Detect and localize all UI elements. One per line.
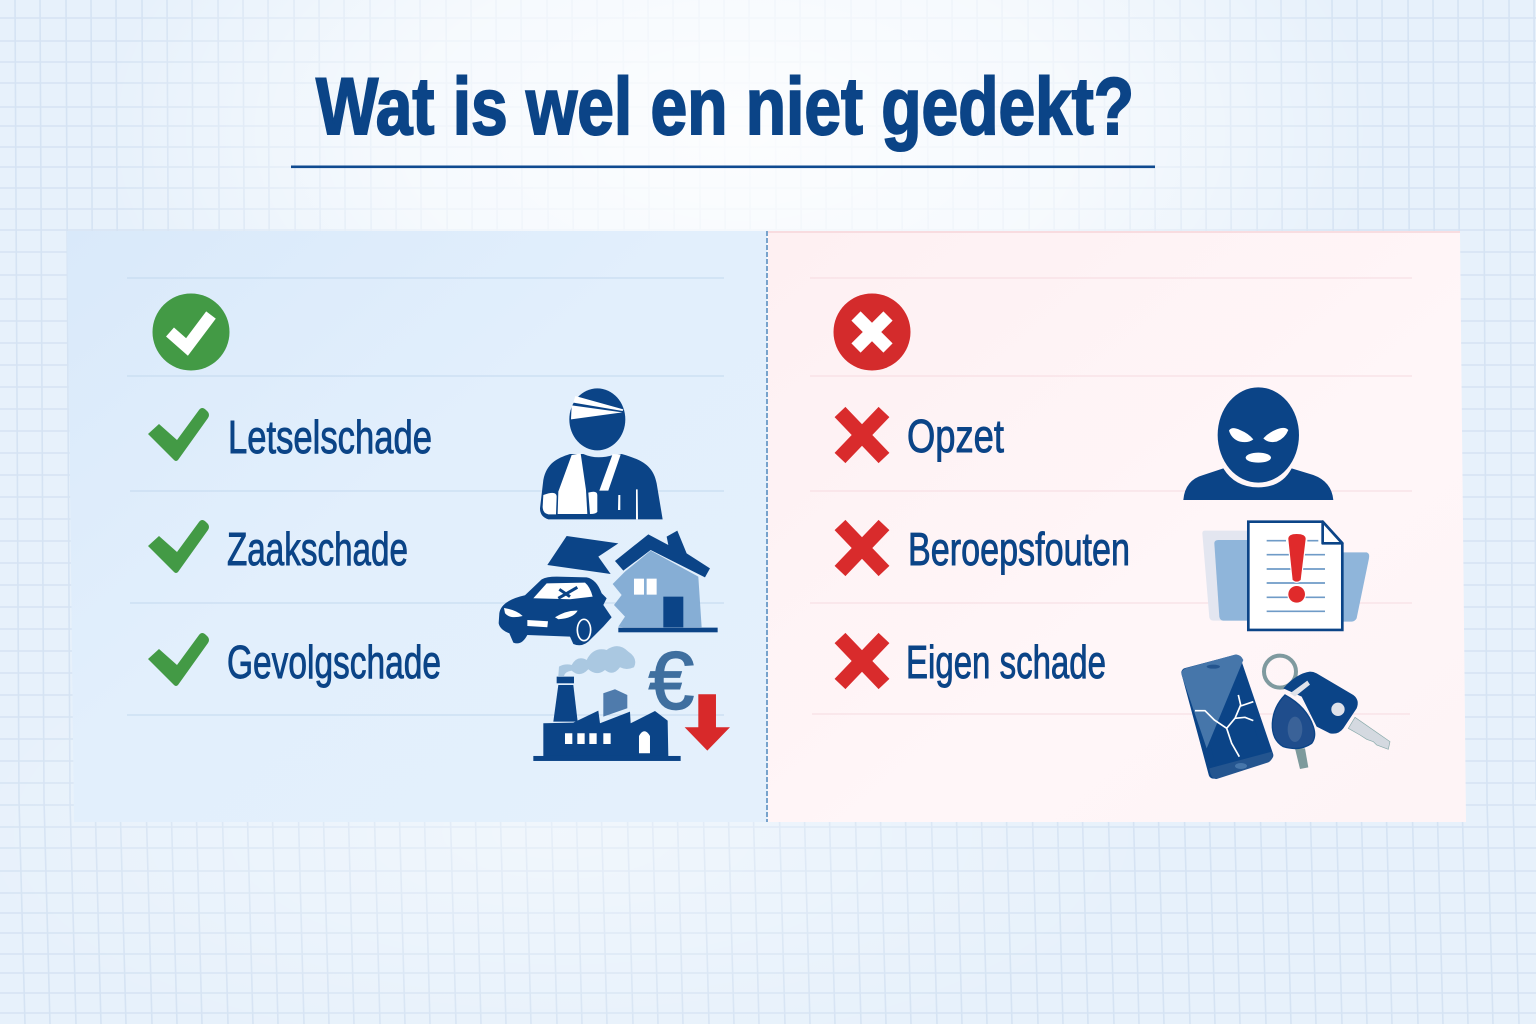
icon: damaged car and house	[499, 531, 718, 645]
item: Zaakschade: Zaakschade	[227, 523, 408, 575]
item: Letselschade: Letselschade	[228, 411, 432, 463]
item: Gevolgschade	[148, 633, 441, 688]
title underline	[291, 166, 1155, 168]
item: Opzet	[840, 410, 1004, 462]
panel: not covered	[768, 231, 1466, 822]
icon: red circle cross	[834, 294, 910, 370]
icon: factory with falling euro	[533, 635, 730, 761]
item: Eigen schade	[840, 636, 1106, 688]
title: Wat is wel en niet gedekt?	[316, 62, 1134, 152]
icon: green circle check	[152, 294, 230, 370]
item: Beroepsfouten: Beroepsfouten	[908, 523, 1130, 575]
item: Gevolgschade: Gevolgschade	[227, 636, 441, 688]
icon: cracked phone and keys	[1182, 655, 1390, 779]
item: Eigen schade: Eigen schade	[906, 636, 1106, 688]
panel: covered	[67, 231, 767, 822]
icon: masked burglar	[1183, 387, 1333, 500]
icon: factory with falling euro: €	[649, 635, 694, 726]
item: Opzet: Opzet	[907, 410, 1004, 462]
item: Letselschade	[148, 408, 432, 463]
item: Zaakschade	[148, 520, 408, 575]
icon: injured person	[540, 388, 663, 519]
item: Beroepsfouten	[840, 523, 1130, 575]
icon: document with warning	[1202, 522, 1369, 630]
panel divider	[766, 231, 768, 822]
